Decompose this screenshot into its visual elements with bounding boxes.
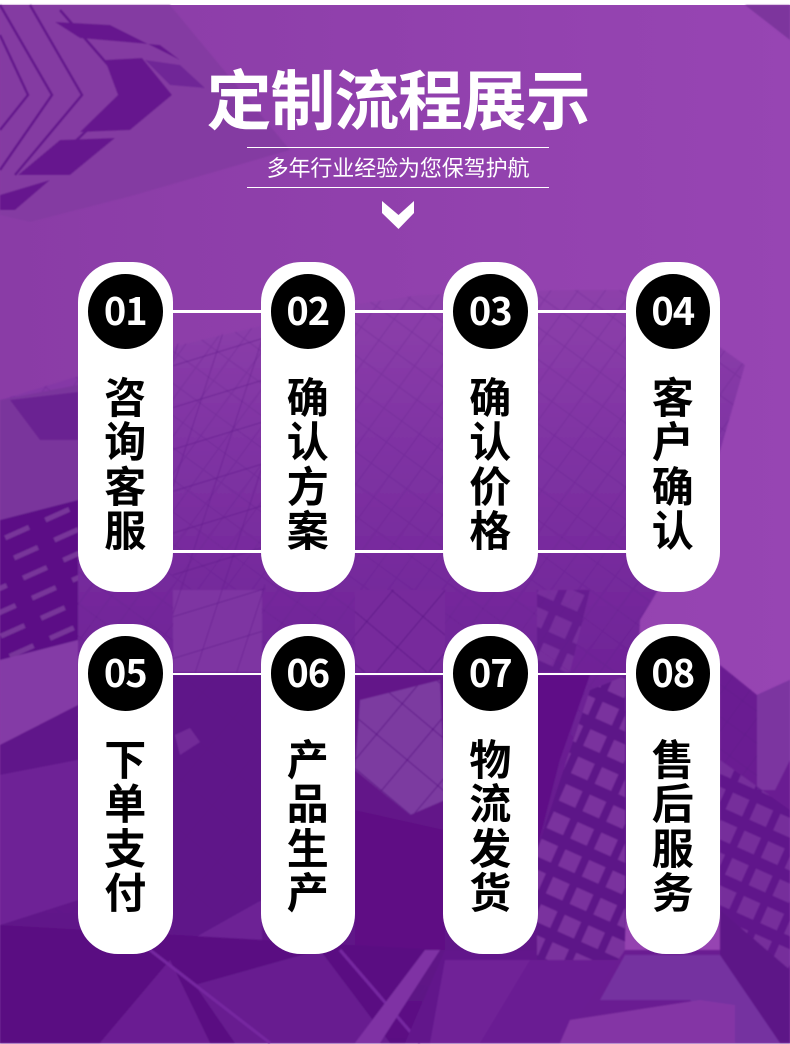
step 01: 咨	[104, 365, 146, 426]
step 05: 下	[104, 727, 146, 788]
step 07	[443, 624, 538, 954]
step 01: 01	[104, 281, 147, 336]
row 2 dark lower glass	[173, 675, 262, 960]
main facade	[0, 290, 745, 1043]
step 05: 支	[104, 816, 146, 877]
step 03	[443, 262, 538, 592]
connector lines: row 2 top	[170, 673, 630, 675]
step 06: 06	[286, 643, 329, 698]
step 08: 服	[652, 816, 694, 877]
step 02: 方	[287, 454, 329, 515]
step 06	[260, 624, 355, 954]
step 04	[626, 262, 720, 592]
step 03: 认	[469, 409, 511, 470]
step 08: 08	[651, 643, 694, 698]
step 03: 格	[469, 498, 511, 559]
step 05: 05	[104, 643, 147, 698]
step 02	[260, 262, 355, 592]
step 01: 服	[104, 498, 146, 559]
step 03: 价	[469, 454, 511, 515]
step 06: 产	[287, 727, 329, 788]
step 08	[626, 624, 720, 954]
icon: down chevron	[382, 201, 414, 229]
subtitle: 多年行业经验为您保驾护航	[267, 151, 529, 183]
step 08: 售	[652, 727, 694, 788]
left column textures	[0, 385, 78, 560]
step 02: 确	[287, 365, 329, 426]
step 08: 务	[652, 860, 694, 921]
step 04: 客	[652, 365, 694, 426]
bottom dark band	[0, 925, 440, 1043]
step 04: 04	[651, 281, 694, 336]
step 04: 确	[652, 454, 694, 515]
step 06: 品	[287, 771, 329, 832]
step 03: 确	[469, 365, 511, 426]
step 06: 生	[287, 816, 329, 877]
step 01	[78, 262, 172, 592]
step 07: 07	[469, 643, 512, 698]
step 07: 货	[469, 860, 511, 921]
step 04: 认	[652, 498, 694, 559]
step 01: 客	[104, 454, 146, 515]
title: 定制流程展示	[207, 49, 589, 143]
subtitle	[247, 147, 549, 188]
connector lines: row 1 top	[170, 310, 630, 313]
step 02: 案	[287, 498, 329, 559]
step 05	[78, 624, 172, 954]
top-left building	[0, 5, 290, 222]
step 06: 产	[287, 860, 329, 921]
step 08: 后	[652, 771, 694, 832]
step 04: 户	[652, 409, 694, 470]
step 07: 发	[469, 816, 511, 877]
step 02: 02	[286, 281, 329, 336]
connector lines: row 1 bottom	[170, 550, 630, 553]
right tower	[537, 675, 590, 850]
step 07: 流	[469, 771, 511, 832]
step 05: 单	[104, 771, 146, 832]
right-hand tower	[560, 665, 790, 1043]
step 01: 询	[104, 409, 146, 470]
step 07: 物	[469, 727, 511, 788]
step 05: 付	[104, 860, 146, 921]
step 02: 认	[287, 409, 329, 470]
step 03: 03	[469, 281, 512, 336]
